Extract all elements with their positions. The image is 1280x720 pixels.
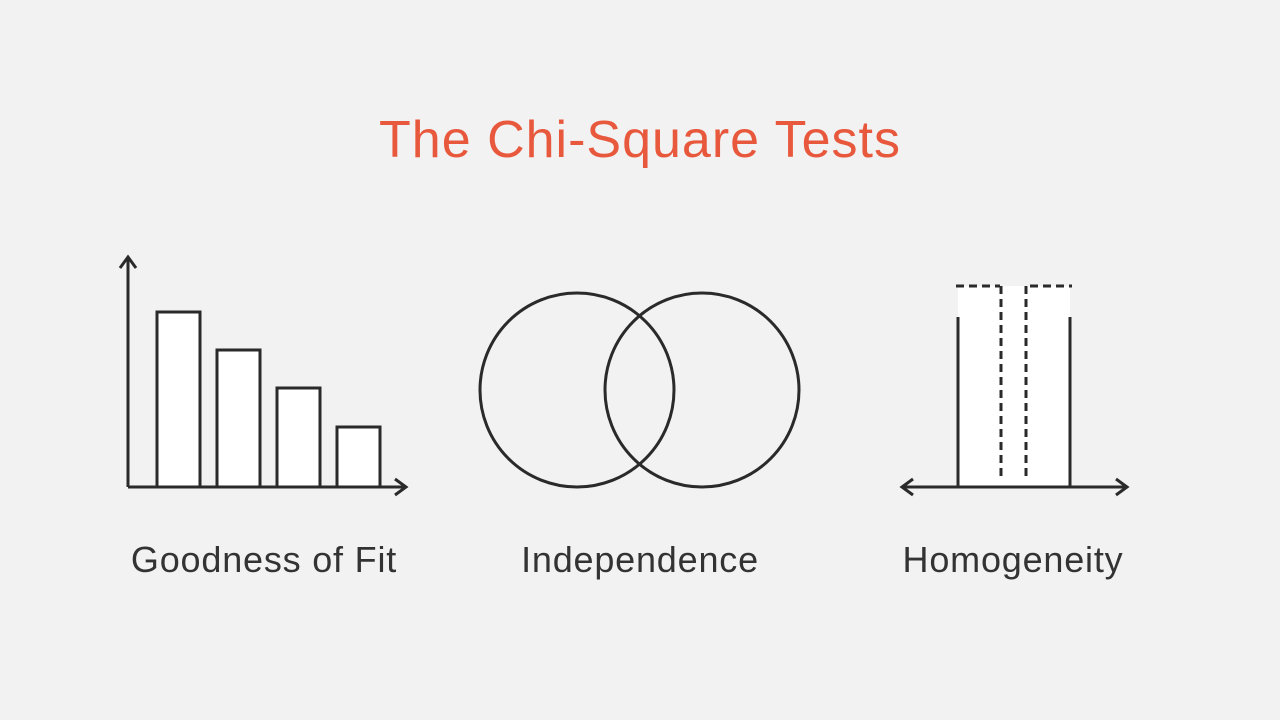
icon: venn diagram xyxy=(480,293,799,487)
icon: bar chart xyxy=(120,257,406,495)
title: The Chi-Square Tests xyxy=(379,111,901,169)
label: goodness of fit: Goodness of Fit xyxy=(131,539,397,580)
label: independence: Independence xyxy=(521,539,759,580)
label: homogeneity: Homogeneity xyxy=(903,539,1123,580)
icon: homogeneity xyxy=(902,286,1127,495)
